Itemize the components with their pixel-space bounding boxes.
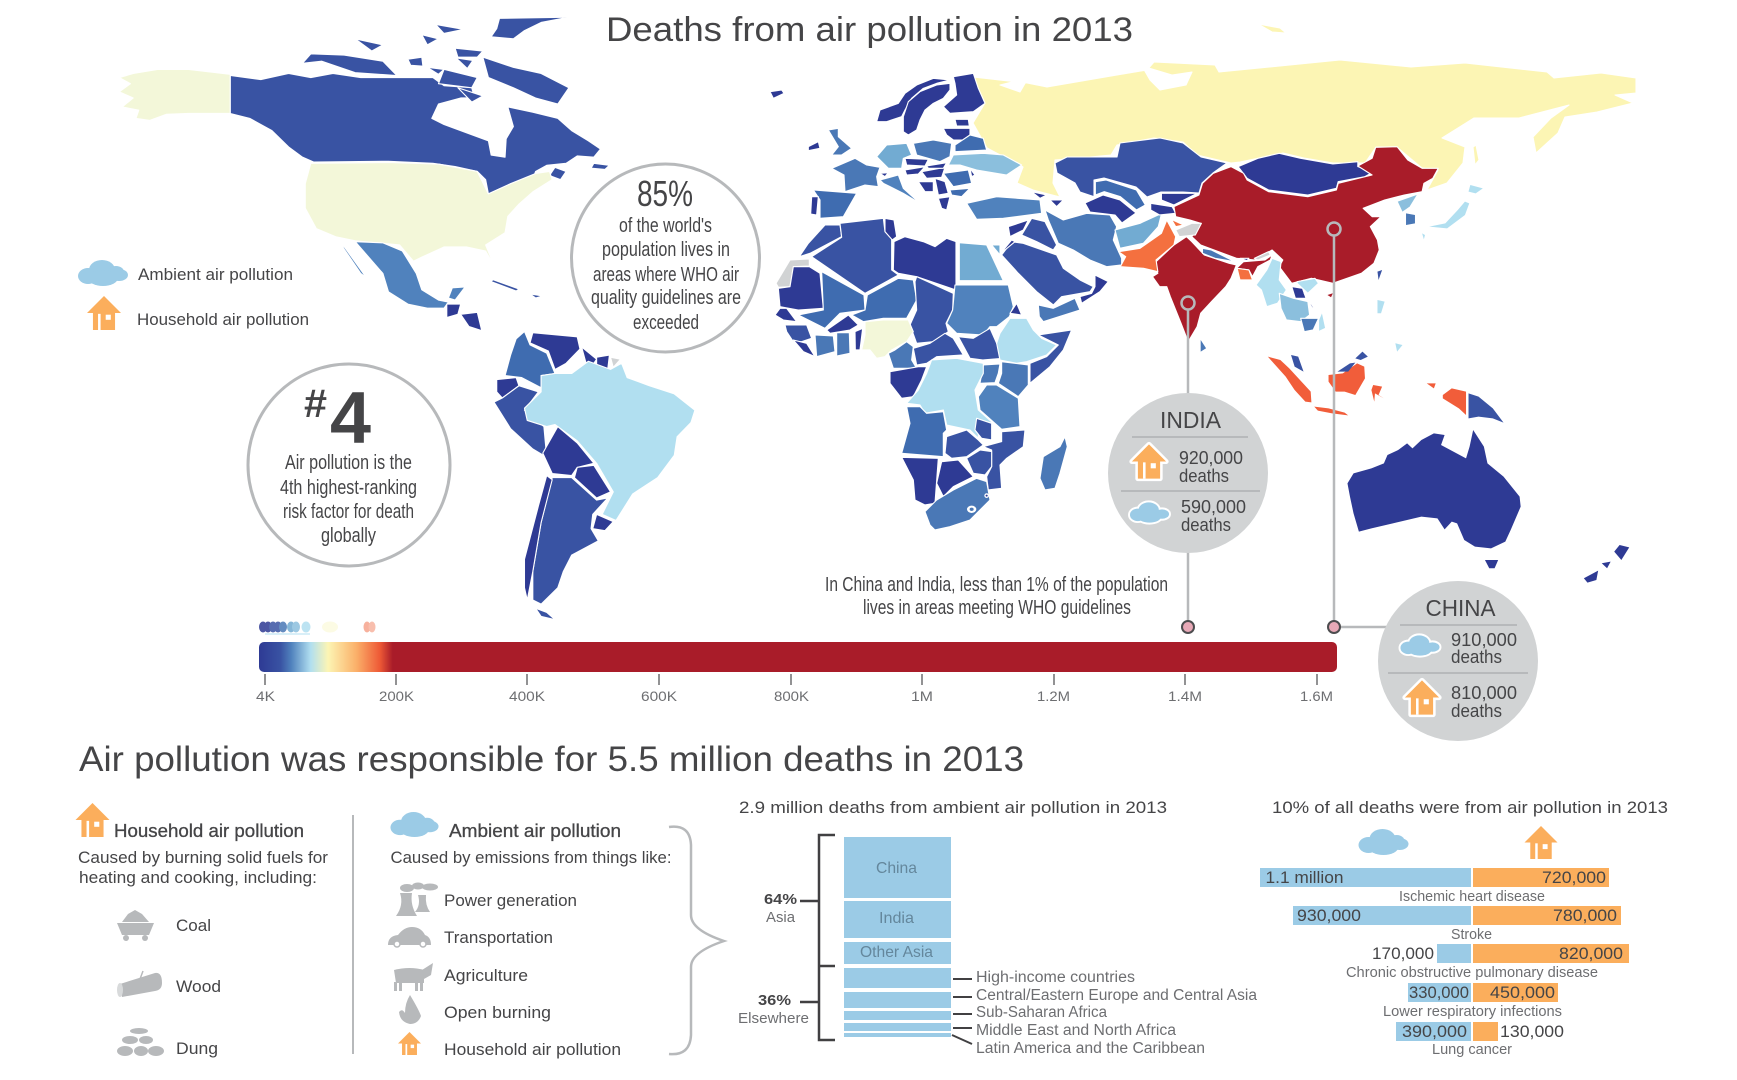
callout: 85 percent: of the world's xyxy=(619,215,712,237)
icon: house column xyxy=(1524,826,1558,859)
bubble: China: deaths xyxy=(1451,647,1502,667)
icon: cloud xyxy=(390,812,439,837)
label: agriculture: Agriculture xyxy=(444,966,528,985)
label: household air pollution: Household air pollution xyxy=(444,1040,621,1059)
share labels: Asia xyxy=(766,909,796,926)
map: Russia xyxy=(973,24,1636,197)
note: China and India xyxy=(825,574,1168,619)
Alaska xyxy=(119,69,230,120)
icon: power generation xyxy=(396,882,438,916)
scale: tick labels: 1.4M xyxy=(1168,688,1202,704)
icon: cow xyxy=(394,963,433,991)
United States xyxy=(305,162,552,265)
scale: ticks xyxy=(265,674,1317,685)
Libya xyxy=(893,237,956,290)
Saudi Arabia xyxy=(1002,242,1093,305)
scale: tick labels: 1.2M xyxy=(1037,688,1070,704)
bubble: India: deaths xyxy=(1179,466,1229,486)
diverging bars xyxy=(1260,868,1629,1041)
Ethiopia xyxy=(997,318,1057,363)
map: South America xyxy=(494,331,695,620)
Madagascar xyxy=(1040,437,1067,490)
label: open burning: Open burning xyxy=(444,1003,551,1022)
scale: gradient bar xyxy=(259,642,1337,672)
South Africa xyxy=(925,478,990,530)
bubble: China: 810,000 xyxy=(1451,683,1517,703)
Mongolia xyxy=(1238,153,1374,195)
bar values: 330,000 xyxy=(1409,984,1469,1002)
Central America and Caribbean xyxy=(447,304,461,318)
icon: wood xyxy=(117,971,162,997)
scale: tick labels: 600K xyxy=(641,688,678,704)
Australia xyxy=(1347,430,1521,548)
bar values: 390,000 xyxy=(1402,1023,1467,1041)
icon: house xyxy=(76,803,110,837)
Afghanistan xyxy=(1115,213,1162,248)
scale: tick labels: 200K xyxy=(379,688,415,704)
brackets xyxy=(800,835,835,1040)
bubble: India: 590,000 xyxy=(1181,497,1246,517)
Arctic islands xyxy=(302,17,609,180)
map: South and East Asia xyxy=(1095,147,1483,352)
callout: number 4 risk factor: 4 xyxy=(330,378,371,459)
bubble: India xyxy=(1108,393,1268,553)
region labels: Latin America and the Caribbean xyxy=(976,1040,1205,1057)
pin: China on scale xyxy=(1328,621,1340,633)
disease labels: Lung cancer xyxy=(1432,1042,1512,1058)
callout: number 4 risk factor: globally xyxy=(321,525,376,547)
Mexico xyxy=(355,242,448,308)
pointer lines xyxy=(1182,222,1390,627)
label: dung: Dung xyxy=(176,1039,218,1058)
Argentina xyxy=(533,478,608,604)
region labels: Central/Eastern Europe and Central Asia xyxy=(976,987,1257,1004)
callout: 85 percent: areas where WHO air xyxy=(593,264,739,286)
Democratic Republic of the Congo xyxy=(907,358,993,438)
bubble: India: 920,000 xyxy=(1179,448,1243,468)
callout: 85 percent: quality guidelines are xyxy=(591,287,741,309)
callout: number 4 risk factor: risk factor for death xyxy=(283,501,414,523)
legend xyxy=(78,260,309,330)
bar values: 930,000 xyxy=(1297,907,1361,925)
title: Deaths from air pollution in 2013 xyxy=(606,11,1133,49)
icon: dung xyxy=(117,1028,164,1056)
leader lines xyxy=(952,979,972,1044)
label: coal: Coal xyxy=(176,916,211,935)
region labels xyxy=(976,969,1257,1057)
divider xyxy=(352,815,354,1054)
household description xyxy=(78,848,328,887)
icon: ambient cloud xyxy=(78,260,128,286)
disease labels: Chronic obstructive pulmonary disease xyxy=(1346,965,1598,981)
callout: 85 percent: population lives in xyxy=(602,239,730,261)
chart: ambient deaths by region xyxy=(738,798,1257,1057)
legend label: household: Household air pollution xyxy=(137,310,309,329)
bar labels xyxy=(860,860,933,961)
legend label: ambient: Ambient air pollution xyxy=(138,265,293,284)
scale: tick labels: 400K xyxy=(509,688,546,704)
note: China and India: lives in areas meeting WHO guidelines xyxy=(863,597,1131,619)
Southeast Asia xyxy=(1256,258,1286,307)
region labels: Middle East and North Africa xyxy=(976,1022,1176,1039)
icon: household house xyxy=(87,296,121,330)
icon: coal xyxy=(117,910,154,941)
China xyxy=(1174,147,1438,283)
world map xyxy=(119,17,1636,620)
map: North America xyxy=(119,17,609,343)
ambient description: Caused by emissions from things like: xyxy=(390,848,672,867)
region labels: High-income countries xyxy=(976,969,1135,986)
household description: Caused by burning solid fuels for xyxy=(78,848,328,867)
Algeria xyxy=(812,218,898,293)
callout: number 4 risk factor: 4th highest-ranking xyxy=(280,477,417,499)
Iran xyxy=(1045,210,1122,267)
bar labels: China xyxy=(876,860,917,877)
bar values: 450,000 xyxy=(1490,984,1555,1002)
note: China and India: In China and India, less than 1% of the population xyxy=(825,574,1168,596)
bar values: 1.1 million xyxy=(1266,869,1344,887)
household heading: Household air pollution xyxy=(114,821,304,841)
bar values: 170,000 xyxy=(1372,945,1434,963)
label: transportation: Transportation xyxy=(444,928,553,947)
heading: 5.5 million deaths: Air pollution was responsible for 5.5 million deaths in 2013 xyxy=(79,740,1024,779)
Pakistan xyxy=(1119,220,1176,272)
bar labels: India xyxy=(879,910,914,927)
callout: number 4 risk factor: # xyxy=(304,382,327,426)
colour scale xyxy=(256,622,1337,704)
share labels: Elsewhere xyxy=(738,1010,809,1027)
Turkey xyxy=(967,197,1042,219)
callout: 85 percent: 85% xyxy=(637,173,693,214)
bar values: 720,000 xyxy=(1542,869,1606,887)
bubble: China: deaths xyxy=(1451,701,1502,721)
region labels: Sub-Saharan Africa xyxy=(976,1004,1107,1021)
disease labels: Stroke xyxy=(1451,927,1492,943)
icon: car xyxy=(388,927,431,947)
scale: tick labels: 1.6M xyxy=(1300,688,1333,704)
share labels xyxy=(738,891,809,1027)
scale: tick labels: 1M xyxy=(911,688,933,704)
chart title: 2.9 million deaths from ambient air pollution in 2013 xyxy=(739,798,1167,817)
disease labels xyxy=(1346,889,1598,1058)
brace xyxy=(669,827,724,1054)
scale: tick labels: 4K xyxy=(256,688,276,704)
disease labels: Lower respiratory infections xyxy=(1383,1004,1562,1020)
bar values: 130,000 xyxy=(1500,1023,1564,1041)
callout: number 4 risk factor xyxy=(248,364,450,566)
India xyxy=(1152,237,1236,342)
panel: ambient air pollution xyxy=(388,812,724,1059)
bubble: India: INDIA xyxy=(1160,407,1222,433)
Canada xyxy=(230,73,601,194)
label: wood: Wood xyxy=(176,977,221,996)
chart title: 10% of all deaths were from air pollution in 2013 xyxy=(1272,798,1668,817)
callout: number 4 risk factor: Air pollution is the xyxy=(285,452,412,474)
Brazil xyxy=(524,361,695,520)
callout: 85 percent: exceeded xyxy=(633,312,699,334)
bar values xyxy=(1266,869,1623,1041)
bubble: China xyxy=(1378,581,1538,741)
household description: heating and cooking, including: xyxy=(79,868,317,887)
icon: open burning xyxy=(399,995,421,1024)
panel: household air pollution xyxy=(76,803,328,1058)
map: Europe and Middle East xyxy=(770,73,1162,322)
bar values: 820,000 xyxy=(1559,945,1623,963)
share labels: 36% xyxy=(758,992,791,1009)
label: power generation: Power generation xyxy=(444,891,577,910)
scale: country dots xyxy=(259,622,376,632)
map: Indonesia and Oceania xyxy=(1268,352,1629,583)
bubble: China: CHINA xyxy=(1426,595,1496,621)
scale: tick labels: 800K xyxy=(774,688,810,704)
bar values: 780,000 xyxy=(1553,907,1617,925)
icon: cloud column xyxy=(1358,829,1408,855)
share labels: 64% xyxy=(764,891,797,908)
stacked bars xyxy=(844,837,951,1037)
scale: tick labels xyxy=(256,688,1333,704)
New Zealand xyxy=(1614,545,1629,560)
East Asian islands xyxy=(1201,185,1483,352)
Nigeria xyxy=(862,320,913,358)
bar labels: Other Asia xyxy=(860,944,933,961)
Kazakhstan xyxy=(1055,138,1227,197)
callout: 85 percent xyxy=(572,164,760,352)
icon: small house xyxy=(398,1032,421,1055)
disease labels: Ischemic heart disease xyxy=(1399,889,1545,905)
map: Central Asia xyxy=(1055,138,1227,223)
bubble: China: 910,000 xyxy=(1451,630,1517,650)
Egypt xyxy=(959,243,1003,281)
map: Africa xyxy=(775,218,1072,530)
ambient heading: Ambient air pollution xyxy=(449,821,621,841)
chart: deaths by disease xyxy=(1260,798,1668,1058)
bubble: India: deaths xyxy=(1181,515,1231,535)
pin: India on scale xyxy=(1182,621,1194,633)
